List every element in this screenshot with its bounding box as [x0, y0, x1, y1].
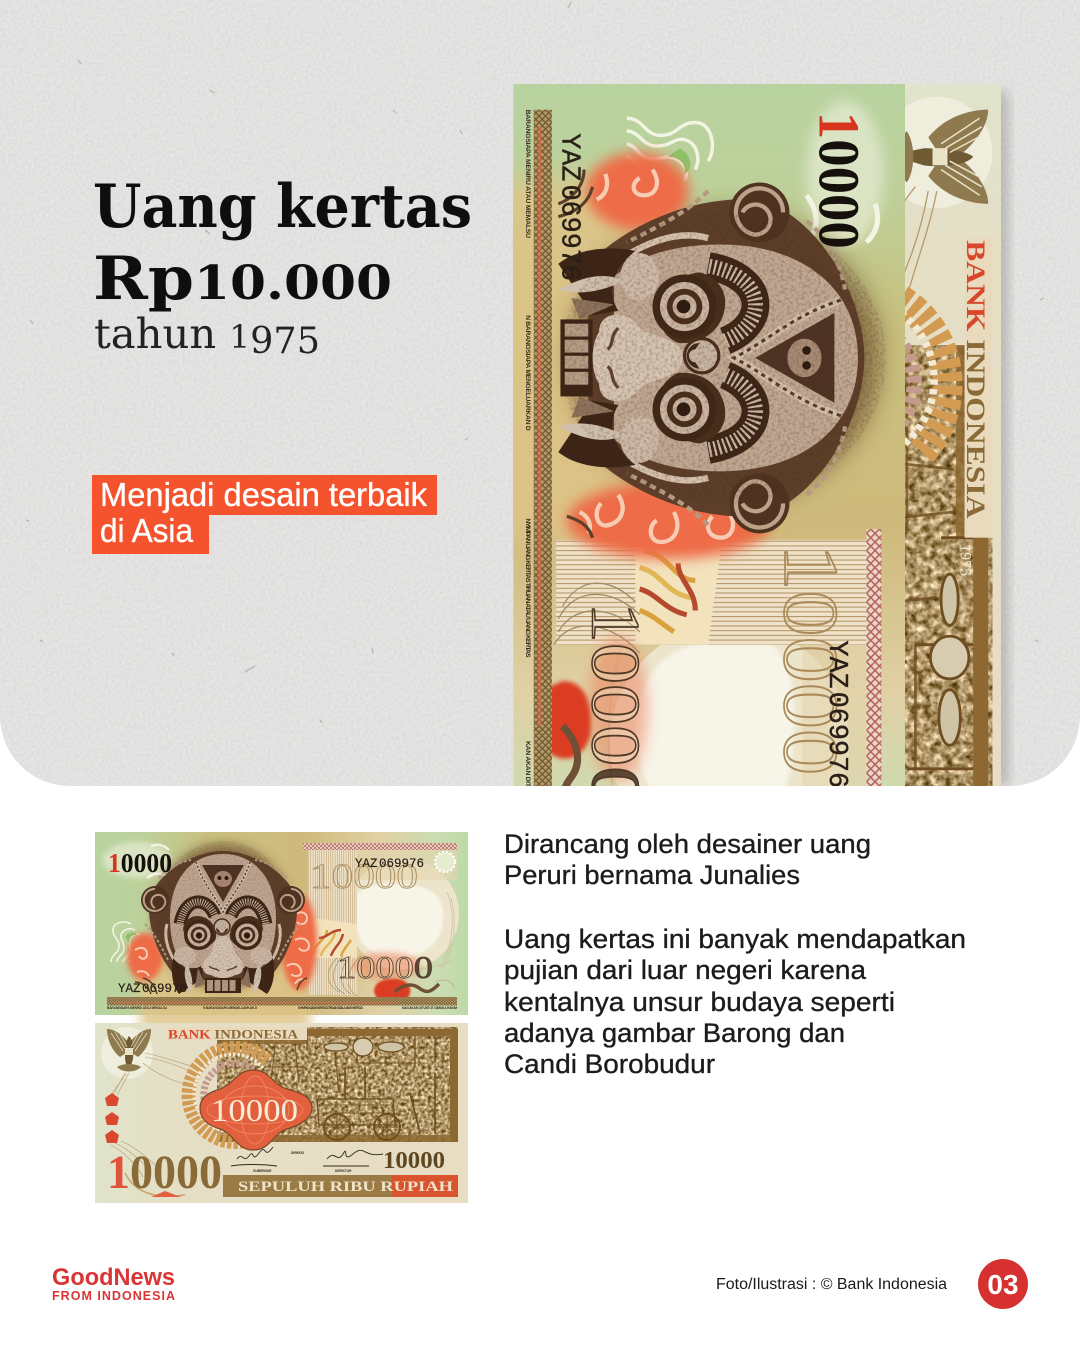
small banknote: back side: DIREKSI [291, 1151, 304, 1155]
page number badge: 03 [987, 1269, 1019, 1300]
small banknote: front side: 1000 0 [337, 949, 433, 985]
small banknote: back side: 1975 [310, 1038, 322, 1044]
large banknote: front side: BARANGSIAPA MENIRU ATAU MEMALSU [524, 110, 531, 238]
small banknote: front side: 069976 [379, 857, 424, 871]
callout: highlighted tag: Menjadi desain terbaik [100, 476, 427, 513]
small banknote: back side: 10000 [107, 1146, 222, 1199]
large rotated banknote: front and back [513, 84, 1001, 786]
logo: GoodNews from Indonesia [52, 1264, 175, 1303]
panel: textured grey header [0, 0, 1080, 786]
paragraph: designer: Dirancang oleh desainer uang [504, 829, 871, 859]
large banknote: front side: 069976 [554, 185, 584, 281]
large banknote: front side: 1000 0 [578, 602, 654, 807]
paragraph: praise [504, 924, 966, 1079]
subtitle: tahun 1 [94, 310, 250, 358]
large banknote: front side [513, 84, 905, 786]
callout: highlighted tag [92, 475, 437, 554]
small banknote: front side: NYIMPAN UANG KERTAS TIRUAN ATAU UANG KERTAS [298, 1006, 363, 1010]
small banknote: back side: 10000 [383, 1148, 445, 1174]
paragraph: praise: Candi Borobudur [504, 1049, 715, 1079]
small banknote: back side: DIREKTUR [335, 1169, 352, 1173]
photo credit: Foto/Ilustrasi : © Bank Indonesia [716, 1276, 947, 1293]
large banknote: front side: N BARANGSIAPA MENGELUARKAN D [524, 315, 531, 431]
paragraph: praise: kentalnya unsur budaya seperti [504, 987, 895, 1017]
small banknote: front side: KAN AKAN DITUNTUT DIMUKA HAKIM [402, 1006, 457, 1010]
page number badge [978, 1259, 1028, 1309]
paragraph: designer: Peruri bernama Junalies [504, 860, 800, 890]
large banknote: back side strip: 1975 [956, 544, 973, 576]
small banknote: back side: SEPULUH RIBU RUPIAH [238, 1179, 453, 1195]
small banknote: front side: N BARANGSIAPA MENGELUARKAN D [203, 1006, 258, 1010]
callout: highlighted tag: di Asia [100, 512, 194, 549]
small banknote: front side: 10000 [310, 856, 418, 896]
description text [504, 829, 966, 1079]
paragraph: praise: pujian dari luar negeri karena [504, 955, 867, 985]
banknote shadow [1001, 88, 1014, 786]
small banknote: front side: YAZ [118, 982, 141, 996]
subtitle: 975 [250, 321, 320, 362]
small banknote: back side [95, 1023, 468, 1203]
large banknote: back side strip [905, 84, 1001, 786]
paragraph: praise: Uang kertas ini banyak mendapatkan [504, 924, 966, 954]
small banknote: back side: 10000 [211, 1092, 298, 1128]
logo: GoodNews from Indonesia: GoodNews [52, 1264, 175, 1291]
large banknote: front side: NYIMPAN UANG KERTAS TIRUAN ATAU UANG KERTAS [524, 518, 531, 658]
small banknote: front side: BARANGSIAPA MENIRU ATAU MEMALSU [107, 1006, 168, 1010]
large banknote: front side: YAZ [821, 640, 851, 689]
large banknote: back side strip: BANK INDONESIA [961, 240, 991, 519]
paragraph: designer [504, 829, 871, 890]
small banknote: front side [95, 832, 468, 1032]
paragraph: praise: adanya gambar Barong dan [504, 1018, 845, 1048]
large banknote: front side: YAZ [554, 133, 584, 181]
logo: GoodNews from Indonesia: FROM INDONESIA [52, 1289, 175, 1303]
large banknote: front side: 10000 [768, 544, 854, 775]
large banknote: front side: KAN AKAN DITUNTUT DIMUKA HAKIM [524, 741, 531, 859]
small banknote: front side: 069976 [142, 982, 187, 996]
title [93, 172, 472, 314]
large banknote: front side: 1 0000 [806, 112, 869, 249]
title: Uang kertas [93, 172, 472, 242]
small banknote: back side: BANK INDONESIA [168, 1028, 298, 1042]
title: Rp10.000 [93, 244, 392, 314]
small banknote: front side: YAZ [355, 857, 378, 871]
small banknote: front side: 10000 [108, 848, 172, 878]
small banknote: back side: GUBERNUR [253, 1169, 272, 1173]
large banknote: front side: 069976 [821, 692, 851, 788]
